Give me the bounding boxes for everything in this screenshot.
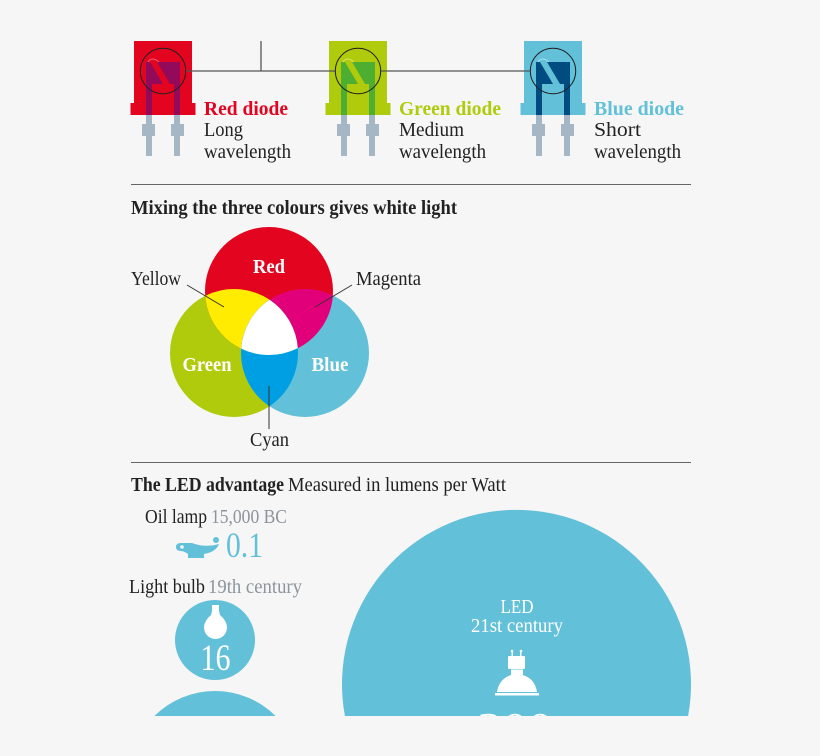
label: blue diode: wavelength [594, 141, 681, 163]
label: green diode: Green diode [399, 98, 501, 120]
value: oil lamp 0.1: 0.1 [226, 525, 263, 565]
label: oil lamp [145, 506, 287, 528]
venn diagram: colour mixing: Green [182, 354, 232, 376]
callout: cyan: Cyan [250, 429, 289, 451]
circle: LED: LED [500, 596, 534, 618]
circle: LED: 21st century [471, 615, 563, 637]
connecting wire between diodes [186, 41, 530, 71]
venn diagram: colour mixing: Blue [312, 354, 349, 376]
label: blue diode: Short [594, 119, 641, 141]
label: light bulb: Light bulb [129, 576, 205, 598]
heading: the LED advantage: The LED advantage [131, 474, 284, 496]
label: red diode [204, 98, 291, 163]
callout: magenta [315, 268, 421, 307]
label: light bulb [129, 576, 302, 598]
circle: LED: 300 [477, 703, 553, 754]
label: blue diode [594, 98, 684, 163]
label: green diode: Medium [399, 119, 464, 141]
label: blue diode: Blue diode [594, 98, 684, 120]
diode: green [326, 41, 390, 156]
label: red diode: Red diode [204, 98, 288, 120]
label: green diode [399, 98, 501, 163]
label: red diode: Long [204, 119, 243, 141]
callout: magenta: Magenta [356, 268, 421, 290]
callout: yellow: Yellow [131, 268, 181, 290]
circle: LED [342, 510, 691, 716]
heading: the LED advantage: Measured in lumens per Watt [288, 474, 506, 496]
venn diagram: colour mixing: Red [253, 256, 285, 278]
label: oil lamp: Oil lamp [145, 506, 207, 528]
heading: the LED advantage [131, 474, 506, 496]
circle: light bulb: 16 [200, 638, 230, 679]
diode: blue [520, 41, 586, 156]
circle: third light source (cropped) [154, 691, 276, 716]
diode: red [130, 41, 196, 156]
callout: cyan [250, 386, 289, 451]
label: light bulb: 19th century [208, 576, 302, 598]
icon: LED spotlight [495, 650, 539, 696]
venn diagram: colour mixing [170, 227, 369, 417]
label: red diode: wavelength [204, 141, 291, 163]
label: oil lamp: 15,000 BC [211, 506, 287, 528]
circle: light bulb [175, 600, 255, 680]
heading: mixing colours: Mixing the three colours gives white light [131, 197, 457, 219]
callout: yellow [131, 268, 224, 307]
icon: oil lamp [176, 537, 219, 558]
label: green diode: wavelength [399, 141, 486, 163]
